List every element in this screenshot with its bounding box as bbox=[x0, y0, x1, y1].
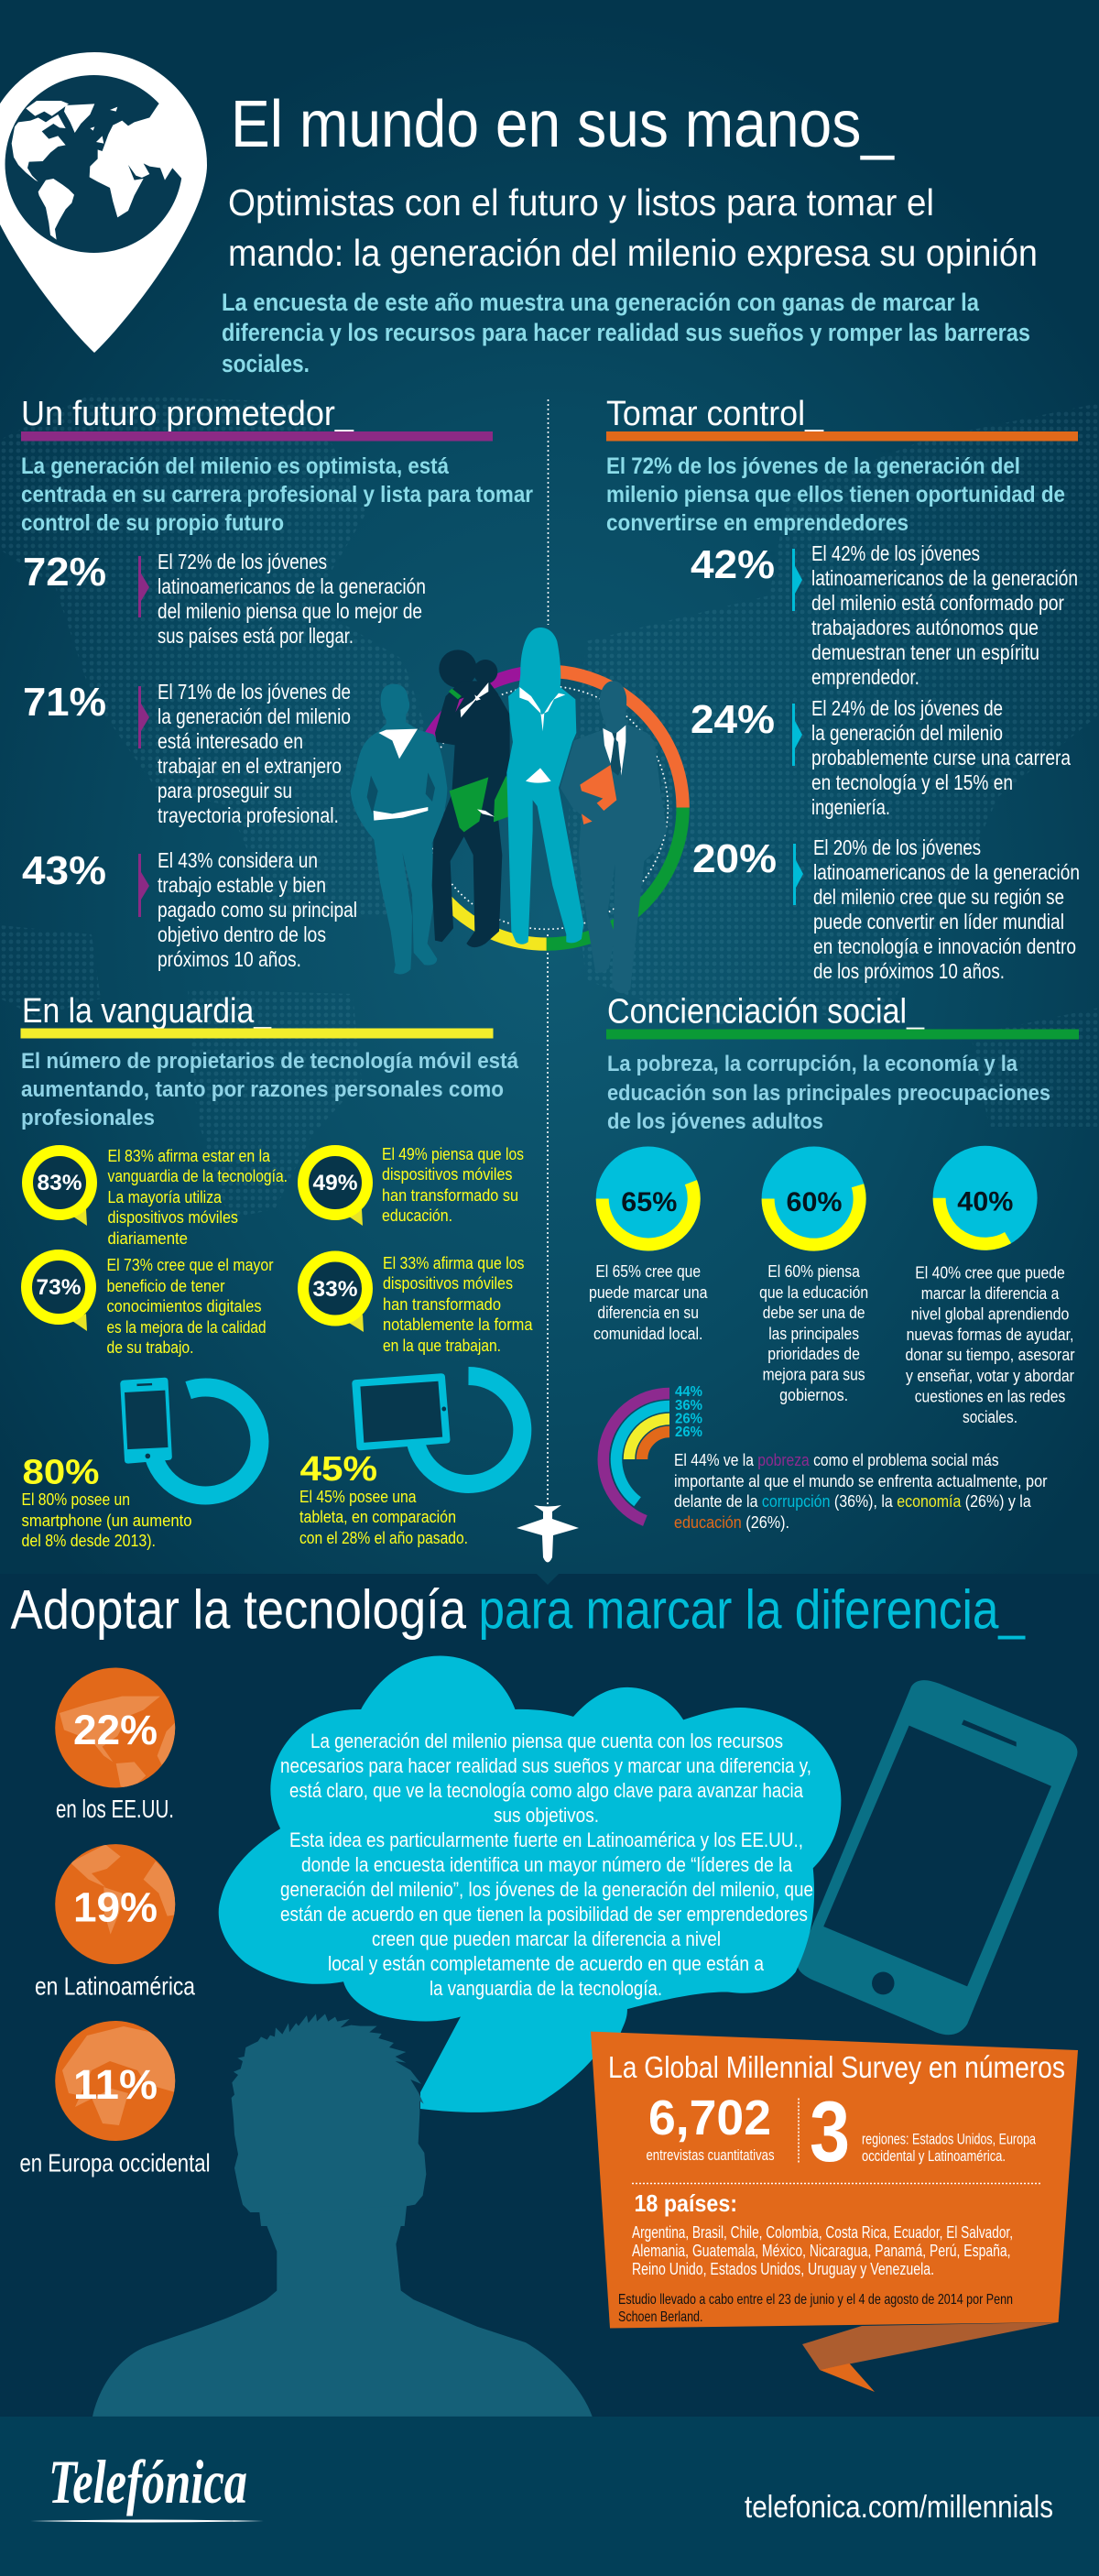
chart: smartphone 80% ring: del 8% desde 2013). bbox=[22, 1532, 156, 1550]
panel: survey in numbers bbox=[591, 2032, 1078, 2392]
cloud text: están de acuerdo en que tienen la posibilidad de ser emprendedores bbox=[280, 1903, 808, 1926]
text: poverty concerns: delante de la corrupción (36%), la economía (26%) y la bbox=[674, 1492, 1032, 1511]
stat 43%: pagado como su principal bbox=[158, 898, 357, 922]
section lead bbox=[21, 453, 533, 536]
stat: 11% en Europa occidental: en Europa occidental bbox=[20, 2149, 211, 2177]
stat 42% bbox=[691, 541, 1078, 689]
stat 24%: El 24% de los jóvenes de bbox=[811, 696, 1003, 720]
text: poverty concerns: educación (26%). bbox=[674, 1513, 789, 1532]
stat 43%: próximos 10 años. bbox=[158, 947, 301, 971]
heading: En la vanguardia_ bbox=[22, 992, 272, 1031]
panel: concienciación social bbox=[589, 993, 1079, 1532]
stat: 22% en los EE.UU. bbox=[55, 1667, 177, 1823]
cloud text: está claro, que ve la tecnología como algo clave para avanzar hacia bbox=[289, 1779, 804, 1802]
bubble 33%: 33% bbox=[313, 1277, 357, 1302]
stat 42%: demuestran tener un espíritu bbox=[811, 640, 1039, 664]
chart: concentric arcs: 36% bbox=[675, 1398, 702, 1414]
donut 65% bbox=[589, 1147, 708, 1343]
donut 65%: comunidad local. bbox=[593, 1325, 702, 1343]
bubble 83%: dispositivos móviles bbox=[108, 1208, 238, 1227]
countries bbox=[632, 2189, 1013, 2278]
bubble 73%: es la mejora de la calidad bbox=[106, 1318, 266, 1337]
stat 42%: emprendedor. bbox=[811, 665, 919, 689]
heading: adoptar la tecnología: para marcar la diferencia_ bbox=[478, 1579, 1026, 1640]
donut 60%: El 60% piensa bbox=[767, 1262, 861, 1281]
bubble 83%: vanguardia de la tecnología. bbox=[108, 1167, 288, 1185]
bubble 49%: 49% bbox=[313, 1171, 357, 1195]
stat 42%: trabajadores autónomos que bbox=[811, 616, 1039, 639]
donut 60%: 60% bbox=[786, 1187, 843, 1217]
section lead: La generación del milenio es optimista, está bbox=[21, 453, 449, 479]
stat: regions: regiones: Estados Unidos, Europa bbox=[862, 2131, 1036, 2147]
yellow bar bbox=[20, 1028, 493, 1039]
stat 43%: objetivo dentro de los bbox=[158, 922, 326, 946]
countries: Reino Unido, Estados Unidos, Uruguay y Venezuela. bbox=[632, 2260, 934, 2278]
icon: large tilted phone bbox=[798, 1680, 1077, 2035]
heading: adoptar la tecnología bbox=[11, 1579, 1026, 1640]
silhouette: person's head and shoulders bbox=[92, 2014, 593, 2417]
url: telefonica.com/millennials bbox=[745, 2490, 1053, 2525]
figure: man in sweater bbox=[351, 684, 447, 975]
section lead: educación son las principales preocupaciones bbox=[607, 1081, 1050, 1106]
donut 60%: las principales bbox=[768, 1325, 859, 1343]
section lead: La pobreza, la corrupción, la economía y la bbox=[607, 1052, 1018, 1076]
stat 71%: está interesado en bbox=[158, 729, 303, 753]
stat 72% bbox=[23, 550, 426, 648]
section lead: de los jóvenes adultos bbox=[607, 1109, 823, 1134]
bubble 33%: El 33% afirma que los bbox=[383, 1254, 524, 1272]
orange bar bbox=[606, 431, 1078, 442]
section lead: El 72% de los jóvenes de la generación del bbox=[606, 453, 1020, 479]
panel: en la vanguardia bbox=[20, 992, 533, 1550]
chart: tablet 45% ring: 45% bbox=[300, 1450, 377, 1489]
countries: 18 países: bbox=[634, 2189, 737, 2217]
panel: un futuro prometedor bbox=[21, 395, 533, 971]
orange panel bbox=[591, 2032, 1078, 2329]
cloud text: Esta idea es particularmente fuerte en Latinoamérica y los EE.UU., bbox=[289, 1828, 803, 1851]
cloud text: creen que pueden marcar la diferencia a nivel bbox=[372, 1927, 721, 1950]
stat 43% bbox=[22, 848, 357, 971]
intro text: La encuesta de este año muestra una generación con ganas de marcar la bbox=[222, 289, 980, 316]
bubble 33% bbox=[303, 1254, 533, 1355]
bubble 83%: El 83% afirma estar en la bbox=[108, 1147, 271, 1165]
donut 65%: El 65% cree que bbox=[595, 1262, 701, 1281]
bubble 73% bbox=[27, 1255, 273, 1357]
section lead bbox=[607, 1052, 1050, 1134]
bubble 33%: notablemente la forma bbox=[383, 1315, 533, 1334]
bubble 83%: diariamente bbox=[108, 1229, 188, 1248]
ring segments bbox=[410, 671, 683, 944]
stat 24%: la generación del milenio bbox=[811, 721, 1003, 745]
stat 24%: 24% bbox=[691, 697, 775, 742]
chart: tablet 45% ring: El 45% posee una bbox=[299, 1488, 417, 1506]
bubble 33%: dispositivos móviles bbox=[383, 1274, 513, 1293]
stat 72%: 72% bbox=[23, 550, 106, 595]
donut 40%: y enseñar, votar y abordar bbox=[906, 1367, 1074, 1385]
donut 60% bbox=[759, 1147, 868, 1404]
stat 71%: la generación del milenio bbox=[158, 704, 351, 728]
cloud text: necesarios para hacer realidad sus sueños y marcar una diferencia y, bbox=[280, 1754, 811, 1777]
chart: concentric arcs: 26% bbox=[675, 1424, 702, 1440]
chart: smartphone 80% ring: 80% bbox=[22, 1453, 99, 1491]
heading: Tomar control_ bbox=[606, 395, 824, 433]
subtitle: Optimistas con el futuro y listos para tomar el bbox=[228, 181, 934, 224]
stat: interviews: entrevistas cuantitativas bbox=[647, 2146, 775, 2164]
figure: man in suit with orange folder bbox=[560, 681, 667, 993]
donut 40%: 40% bbox=[957, 1187, 1013, 1217]
donut 40%: nuevas formas de ayudar, bbox=[907, 1326, 1073, 1344]
purple bar bbox=[21, 431, 493, 442]
text: poverty concerns: El 44% ve la pobreza como el problema social más bbox=[674, 1451, 999, 1469]
chart: tablet 45% ring: tableta, en comparación bbox=[299, 1508, 456, 1526]
bubble 73%: conocimientos digitales bbox=[106, 1297, 262, 1315]
stat 20%: 20% bbox=[692, 836, 777, 881]
donut 40%: donar su tiempo, asesorar bbox=[905, 1346, 1075, 1364]
bubble 73%: El 73% cree que el mayor bbox=[106, 1256, 273, 1274]
cloud text: donde la encuesta identifica un mayor número de “líderes de la bbox=[301, 1853, 793, 1876]
donut 60%: debe ser una de bbox=[763, 1304, 865, 1322]
stat: 11% en Europa occidental: 11% bbox=[73, 2061, 158, 2108]
stat 24%: en tecnología y el 15% en bbox=[811, 770, 1013, 794]
stat: regions bbox=[810, 2083, 1036, 2179]
footnote bbox=[618, 2292, 1013, 2325]
stat 71%: para proseguir su bbox=[158, 779, 292, 802]
cloud text: local y están completamente de acuerdo en que están a bbox=[328, 1952, 765, 1975]
stat 71%: El 71% de los jóvenes de bbox=[158, 680, 351, 704]
cloud tail bbox=[420, 2006, 627, 2112]
stat: 19% en Latinoamérica bbox=[35, 1844, 195, 2001]
donut 40%: cuestiones en las redes bbox=[915, 1387, 1065, 1405]
figure: woman in cyan suit bbox=[506, 628, 583, 944]
footer bbox=[0, 2417, 1099, 2576]
icon: map pin with globe bbox=[0, 52, 207, 353]
figure: woman with green folder bbox=[432, 649, 517, 947]
stat: 19% en Latinoamérica: en Latinoamérica bbox=[35, 1971, 195, 2001]
bubble 49%: dispositivos móviles bbox=[382, 1165, 513, 1184]
intro text: sociales. bbox=[222, 350, 310, 377]
stat: 22% en los EE.UU.: 22% bbox=[73, 1707, 158, 1753]
heading: Concienciación social_ bbox=[607, 993, 925, 1031]
heading: adoptar la tecnología: Adoptar la tecnología bbox=[11, 1579, 467, 1640]
stat 43%: trabajo estable y bien bbox=[158, 873, 326, 897]
chart: tablet 45% ring: con el 28% el año pasado. bbox=[299, 1529, 468, 1547]
donut 40%: marcar la diferencia a bbox=[921, 1284, 1060, 1303]
chart: smartphone 80% ring bbox=[22, 1378, 259, 1550]
stat 42%: El 42% de los jóvenes bbox=[811, 541, 980, 565]
stat 72%: del milenio piensa que lo mejor de bbox=[158, 599, 422, 623]
bubble 83%: 83% bbox=[37, 1171, 82, 1195]
stat 71%: 71% bbox=[23, 680, 106, 725]
subtitle: mando: la generación del milenio expresa su opinión bbox=[228, 232, 1038, 274]
donut 40%: sociales. bbox=[963, 1408, 1017, 1426]
donut 60%: gobiernos. bbox=[779, 1386, 848, 1404]
cloud text: La generación del milenio piensa que cuenta con los recursos bbox=[310, 1730, 783, 1752]
panel: tomar control bbox=[606, 395, 1080, 983]
chart: concentric arcs bbox=[604, 1384, 702, 1521]
ribbon bbox=[802, 2322, 1059, 2370]
intro text bbox=[222, 289, 1030, 377]
bubble 83% bbox=[27, 1147, 288, 1248]
subtitle bbox=[228, 181, 1038, 274]
chart: smartphone 80% ring: El 80% posee un bbox=[22, 1490, 130, 1509]
cloud text bbox=[280, 1730, 813, 2000]
stat 20%: El 20% de los jóvenes bbox=[813, 835, 981, 859]
bubble 73%: beneficio de tener bbox=[106, 1277, 225, 1295]
section lead: convertirse en emprendedores bbox=[606, 510, 909, 536]
bubble 49%: han transformado su bbox=[382, 1186, 518, 1205]
bubble 73%: 73% bbox=[37, 1275, 81, 1300]
bubble 33%: han transformado bbox=[383, 1295, 501, 1314]
stat 20% bbox=[692, 835, 1080, 983]
donut 65%: puede marcar una bbox=[589, 1283, 708, 1302]
donut 40%: El 40% cree que puede bbox=[915, 1264, 1065, 1283]
bubble 49%: El 49% piensa que los bbox=[382, 1145, 524, 1163]
illustration: four young professionals inside a ring bbox=[351, 628, 683, 993]
stat: regions: 3 bbox=[810, 2083, 850, 2179]
donut 65%: 65% bbox=[621, 1187, 677, 1217]
cloud text: sus objetivos. bbox=[494, 1804, 599, 1827]
stat 24% bbox=[691, 696, 1071, 819]
stat 24%: ingeniería. bbox=[811, 795, 890, 819]
donut 60%: prioridades de bbox=[767, 1345, 860, 1363]
stat: 19% en Latinoamérica: 19% bbox=[73, 1884, 158, 1931]
donut 40%: nivel global aprendiendo bbox=[911, 1304, 1069, 1323]
section lead: El número de propietarios de tecnología móvil está bbox=[21, 1049, 519, 1074]
chart: smartphone 80% ring: smartphone (un aumento bbox=[22, 1512, 192, 1530]
stat 43%: El 43% considera un bbox=[158, 848, 318, 872]
stat: 11% en Europa occidental bbox=[20, 2021, 211, 2177]
chart: tablet 45% ring bbox=[299, 1373, 522, 1547]
text: poverty concerns: importante al que el mundo se enfrenta actualmente, por bbox=[674, 1472, 1048, 1490]
section lead bbox=[606, 453, 1065, 536]
green bar bbox=[606, 1030, 1079, 1039]
stat 71%: trabajar en el extranjero bbox=[158, 754, 342, 778]
stat 71%: trayectoria profesional. bbox=[158, 803, 339, 827]
stat: 22% en los EE.UU.: en los EE.UU. bbox=[56, 1795, 174, 1823]
logo: Telefónica: Telefónica bbox=[49, 2447, 247, 2516]
bubble 73%: de su trabajo. bbox=[106, 1338, 194, 1357]
speech cloud bbox=[219, 1655, 841, 2112]
heading: Un futuro prometedor_ bbox=[21, 395, 354, 433]
bubble 83%: La mayoría utiliza bbox=[108, 1188, 223, 1206]
stat 72%: latinoamericanos de la generación bbox=[158, 574, 426, 598]
icon: airplane bbox=[517, 1505, 579, 1563]
section lead bbox=[21, 1049, 519, 1130]
section lead: centrada en su carrera profesional y lista para tomar bbox=[21, 482, 533, 508]
donut 60%: que la educación bbox=[759, 1283, 868, 1302]
stat: regions: occidental y Latinoamérica. bbox=[862, 2147, 1006, 2165]
donut 40% bbox=[905, 1146, 1075, 1426]
stat 42%: 42% bbox=[691, 542, 775, 587]
donut 65%: diferencia en su bbox=[597, 1304, 699, 1322]
center divider bbox=[547, 399, 550, 1504]
cloud text: la vanguardia de la tecnología. bbox=[430, 1977, 662, 2000]
section lead: aumentando, tanto por razones personales como bbox=[21, 1077, 504, 1102]
cloud text: generación del milenio”, los jóvenes de la generación del milenio, que bbox=[280, 1878, 813, 1901]
stat 72%: sus países está por llegar. bbox=[158, 624, 354, 648]
bubble 49% bbox=[303, 1145, 524, 1226]
stat 20%: de los próximos 10 años. bbox=[813, 959, 1005, 983]
stat: interviews: 6,702 bbox=[648, 2090, 771, 2145]
chart: concentric arcs: 44% bbox=[675, 1384, 702, 1400]
stat 43%: 43% bbox=[22, 848, 106, 893]
stat 71% bbox=[23, 680, 351, 827]
stat 72%: El 72% de los jóvenes bbox=[158, 550, 327, 573]
section lead: control de su propio futuro bbox=[21, 510, 284, 536]
chart: concentric arcs: 26% bbox=[675, 1411, 702, 1427]
title: El mundo en sus manos_ bbox=[231, 88, 895, 161]
bubble 33%: en la que trabajan. bbox=[383, 1337, 501, 1355]
section lead: profesionales bbox=[21, 1106, 155, 1130]
text: poverty concerns bbox=[674, 1451, 1048, 1532]
bubble 49%: educación. bbox=[382, 1206, 452, 1225]
donut 60%: mejora para sus bbox=[763, 1365, 865, 1383]
footnote: Schoen Berland. bbox=[618, 2309, 703, 2325]
